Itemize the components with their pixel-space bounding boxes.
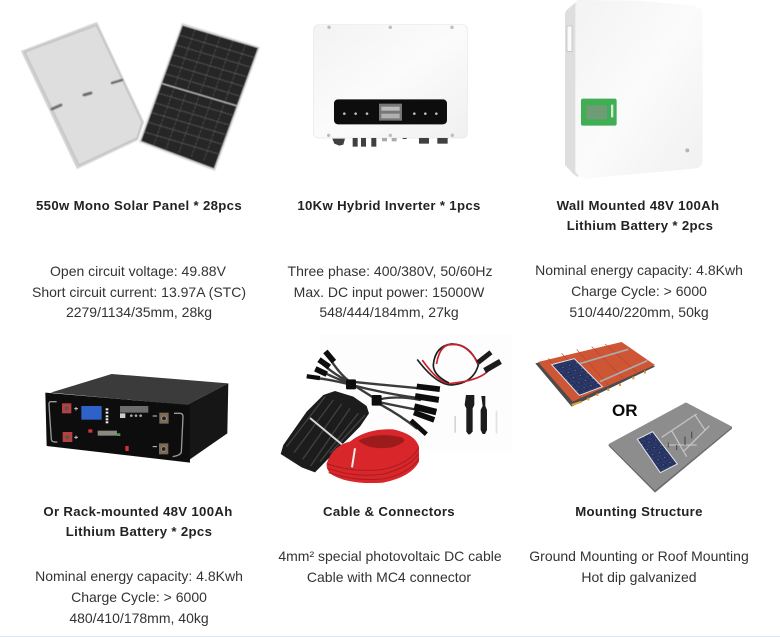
specs: Nominal energy capacity: 4.8Kwh xyxy=(535,262,743,278)
specs: Cable with MC4 connector xyxy=(307,569,471,585)
heading: Wall Mounted 48V 100Ah xyxy=(557,198,719,213)
specs: Nominal energy capacity: 4.8Kwh xyxy=(35,568,243,584)
solar panel back side xyxy=(21,22,144,169)
heading: Cable & Connectors xyxy=(323,504,455,519)
card text: solar panel xyxy=(32,198,246,320)
card text: mounting xyxy=(529,504,749,585)
icon: solar panels, back and front xyxy=(21,22,260,171)
specs xyxy=(529,548,749,585)
specs xyxy=(278,548,502,585)
red cable coil xyxy=(327,429,419,483)
solar panel front side xyxy=(139,23,260,171)
card text: rack battery xyxy=(35,504,243,626)
heading: Lithium Battery * 2pcs xyxy=(66,524,212,539)
specs: 480/410/178mm, 40kg xyxy=(69,610,209,626)
heading: 550w Mono Solar Panel * 28pcs xyxy=(36,198,242,213)
specs: 510/440/220mm, 50kg xyxy=(569,304,709,320)
specs xyxy=(35,568,243,626)
card text: inverter xyxy=(288,198,492,320)
red and black wire loop xyxy=(418,344,490,385)
icon: cables and connectors xyxy=(281,334,513,483)
specs: 548/444/184mm, 27kg xyxy=(319,304,459,320)
specs: Three phase: 400/380V, 50/60Hz xyxy=(288,263,492,279)
icon: hybrid inverter xyxy=(314,25,467,147)
specs: Short circuit current: 13.97A (STC) xyxy=(32,284,246,300)
card text: wall battery xyxy=(535,198,743,320)
specs: Max. DC input power: 15000W xyxy=(294,284,485,300)
specs: Hot dip galvanized xyxy=(581,569,697,585)
label: OR: OR xyxy=(612,401,638,420)
specs: Ground Mounting or Roof Mounting xyxy=(529,548,749,564)
MC4 connector parts xyxy=(465,395,474,434)
heading: Or Rack-mounted 48V 100Ah xyxy=(43,504,233,519)
specs: Charge Cycle: > 6000 xyxy=(71,589,207,605)
heading: Lithium Battery * 2pcs xyxy=(567,218,713,233)
black cable coil xyxy=(281,391,369,472)
specs: 2279/1134/35mm, 28kg xyxy=(66,304,212,320)
icon: mounting structures xyxy=(535,342,732,493)
roof mounting xyxy=(535,342,655,407)
heading: Mounting Structure xyxy=(575,504,703,519)
specs xyxy=(288,263,492,320)
specs: 4mm² special photovoltaic DC cable xyxy=(278,548,502,564)
specs: Charge Cycle: > 6000 xyxy=(571,283,707,299)
heading: 10Kw Hybrid Inverter * 1pcs xyxy=(297,198,481,213)
specs: Open circuit voltage: 49.88V xyxy=(50,263,227,279)
specs xyxy=(535,262,743,320)
icon: wall mounted battery xyxy=(565,0,703,179)
branch connector cables xyxy=(312,356,420,428)
specs xyxy=(32,263,246,320)
card text: cables xyxy=(278,504,502,585)
icon: rack-mounted battery xyxy=(45,374,228,463)
ground mounting xyxy=(609,402,732,493)
